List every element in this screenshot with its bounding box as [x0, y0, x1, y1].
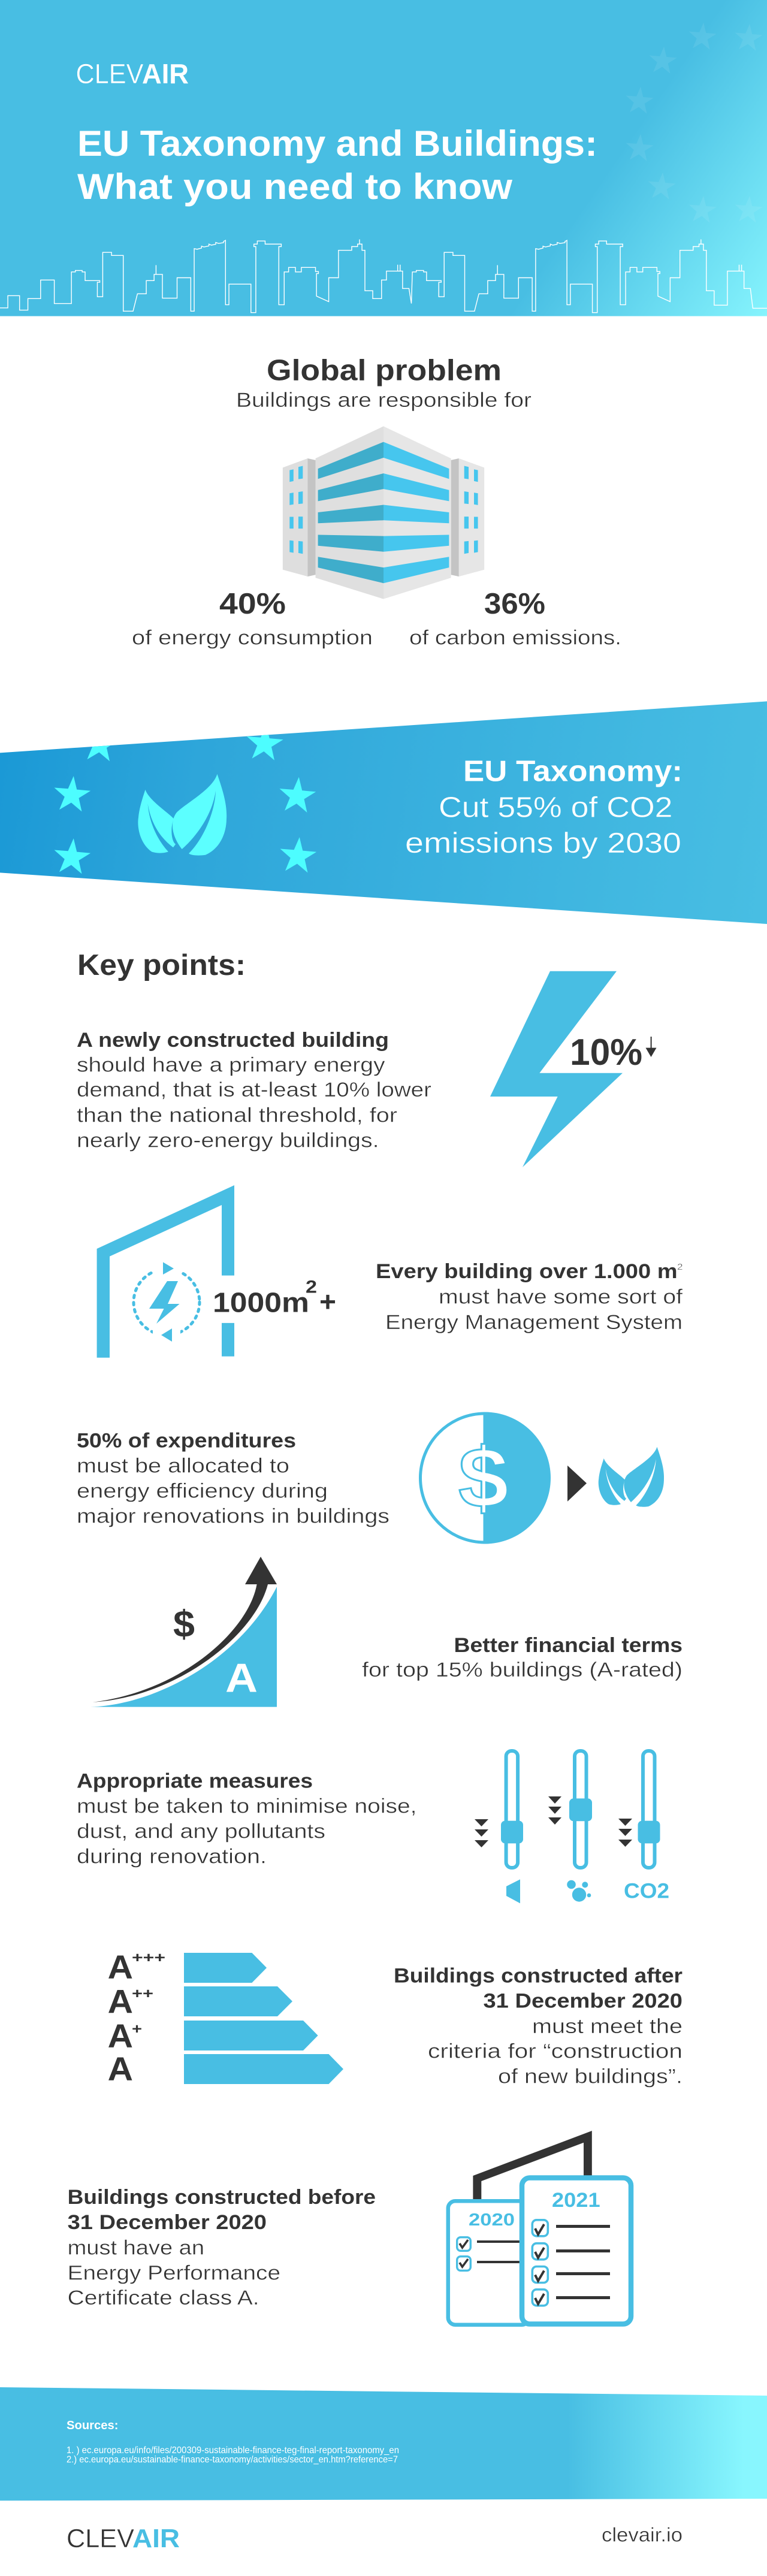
heading: key points: Key points:: [77, 949, 246, 982]
text block: A newly constructed building: [77, 1029, 389, 1052]
panel: key point 6: [108, 1948, 683, 2088]
panel: sources: [0, 2387, 767, 2500]
chart: dust slider: [548, 1751, 592, 1902]
icon: half filled dollar coin: [421, 1412, 549, 1544]
chart: energy rating scale: +: [132, 2021, 142, 2037]
logo: CLEV: [76, 58, 144, 89]
icon: rising cost curve: [90, 1557, 277, 1707]
icon: leaves: [599, 1447, 664, 1507]
city skyline outline: [0, 239, 767, 313]
sources text: 2.) ec.europa.eu/sustainable-finance-taxonomy/activities/sector_en.htm?reference=7: [67, 2454, 398, 2465]
icon: leaves: [138, 774, 227, 856]
panel: EU taxonomy banner: [0, 701, 767, 924]
heading: Global problem: [267, 355, 502, 387]
text block: major renovations in buildings: [77, 1505, 389, 1527]
icon: energy management cycle: [134, 1258, 200, 1345]
text block: nearly zero-energy buildings.: [77, 1129, 379, 1152]
logo: [76, 58, 189, 89]
icon: building: [283, 426, 484, 599]
text block: demand, that is at-least 10% lower: [77, 1079, 431, 1101]
icon: rising cost curve: A: [225, 1656, 258, 1701]
label: 1000 m2 plus: +: [319, 1286, 336, 1317]
text block: for top 15% buildings (A-rated): [362, 1659, 683, 1681]
label: 1000 m2 plus: 1000m: [213, 1287, 309, 1318]
icon: EU stars: [54, 725, 316, 874]
sources text: Sources:: [67, 2419, 119, 2432]
sources text: [67, 2419, 399, 2465]
text block: [394, 1965, 683, 2088]
text block: should have a primary energy: [77, 1054, 385, 1077]
text block: energy efficiency during: [77, 1479, 328, 1502]
text block: Better financial terms: [454, 1634, 683, 1657]
chart: CO2 slider: [618, 1751, 669, 1903]
text block: dust, and any pollutants: [77, 1820, 325, 1843]
text block: Energy Management System: [385, 1311, 683, 1334]
logo: AIR: [142, 58, 189, 89]
text block: [376, 1260, 683, 1334]
text block: [68, 2186, 376, 2309]
text block: Buildings constructed before: [68, 2186, 376, 2209]
sources background: [0, 2387, 767, 2500]
text block: during renovation.: [77, 1845, 267, 1868]
banner background: [0, 701, 767, 924]
text block: Appropriate measures: [77, 1770, 313, 1793]
icon: building roof outline: [473, 2131, 592, 2200]
chart: energy rating scale: A: [108, 2050, 133, 2088]
text block: Certificate class A.: [68, 2287, 259, 2309]
chart: energy rating scale: A: [108, 1983, 133, 2021]
chart: energy rating scale: ++: [132, 1986, 153, 2002]
text block: Energy Performance: [68, 2261, 280, 2284]
text block: must have an: [68, 2236, 204, 2259]
text block: than the national threshold, for: [77, 1104, 397, 1127]
text block: of new buildings”.: [498, 2065, 683, 2088]
chart: energy rating scale: A: [108, 1948, 133, 1986]
footer logo: AIR: [132, 2524, 180, 2553]
text block: [77, 1770, 417, 1868]
panel: key point 1: [77, 971, 657, 1167]
text block: must be allocated to: [77, 1455, 289, 1478]
label: 10 percent lower: 10%: [570, 1032, 642, 1073]
text block: 31 December 2020: [483, 1990, 683, 2013]
icon: rising cost curve: $: [173, 1603, 195, 1645]
text block: [77, 1430, 389, 1527]
icon: building outline: [97, 1185, 234, 1358]
text block: criteria for “construction: [428, 2040, 683, 2063]
icon: 2020 checklist: 2020: [469, 2210, 515, 2230]
footer website: clevair.io: [602, 2524, 683, 2546]
stat: energy: [132, 588, 373, 650]
stat: energy: 40%: [219, 588, 286, 620]
banner text: EU Taxonomy:: [463, 756, 683, 788]
title: EU Taxonomy and Buildings:: [77, 123, 597, 164]
banner text: [405, 756, 683, 859]
stat: carbon: 36%: [484, 588, 545, 620]
text block: must meet the: [532, 2015, 683, 2038]
header panel: [0, 0, 767, 316]
sources text: 1. ) ec.europa.eu/info/files/200309-sustainable-finance-teg-final-report-taxonomy_en: [67, 2445, 399, 2456]
title: [77, 123, 597, 207]
text block: must be taken to minimise noise,: [77, 1795, 417, 1818]
arrow: [567, 1466, 587, 1502]
faint star ring: [626, 23, 763, 223]
icon: 2020 checklist: [448, 2201, 529, 2325]
panel: key point 5: [77, 1751, 669, 1903]
icon: 2021 checklist: 2021: [552, 2189, 600, 2212]
panel: key point 3: [77, 1412, 664, 1544]
text block: [77, 1029, 431, 1152]
panel: key point 2: [97, 1185, 683, 1358]
banner text: emissions by 2030: [405, 828, 681, 859]
panel: key point 7: [68, 2131, 631, 2325]
banner text: Cut 55% of CO2: [439, 792, 672, 824]
icon: lightning bolt: [490, 971, 623, 1167]
footer logo: CLEV: [67, 2524, 135, 2553]
chart: energy rating scale: +++: [132, 1950, 165, 1966]
text block: 31 December 2020: [68, 2211, 267, 2234]
text block: [362, 1634, 683, 1681]
text block: Every building over 1.000 m: [376, 1260, 678, 1283]
chart: CO2 slider: CO2: [624, 1879, 669, 1903]
footer logo: [67, 2524, 180, 2553]
stat: energy: of energy consumption: [132, 627, 373, 650]
text block: must have some sort of: [439, 1285, 683, 1308]
chart: energy rating scale: [108, 1948, 343, 2088]
stat: carbon: of carbon emissions.: [409, 627, 621, 650]
subheading: Buildings are responsible for: [236, 389, 532, 412]
title: What you need to know: [77, 167, 512, 207]
icon: half filled dollar coin: $: [458, 1430, 509, 1526]
chart: energy rating scale: A: [108, 2017, 133, 2055]
label: 1000 m2 plus: [213, 1278, 336, 1318]
icon: 2021 checklist: [522, 2178, 631, 2324]
label: 1000 m2 plus: 2: [306, 1278, 317, 1297]
text block: 50% of expenditures: [77, 1430, 296, 1452]
header background: [0, 0, 767, 316]
panel: key point 4: [90, 1557, 683, 1707]
stat: carbon: [409, 588, 621, 650]
text block: 2: [677, 1262, 683, 1272]
text block: Buildings constructed after: [394, 1965, 683, 1988]
panel: global problem: [132, 355, 621, 650]
chart: noise slider: [475, 1751, 523, 1903]
